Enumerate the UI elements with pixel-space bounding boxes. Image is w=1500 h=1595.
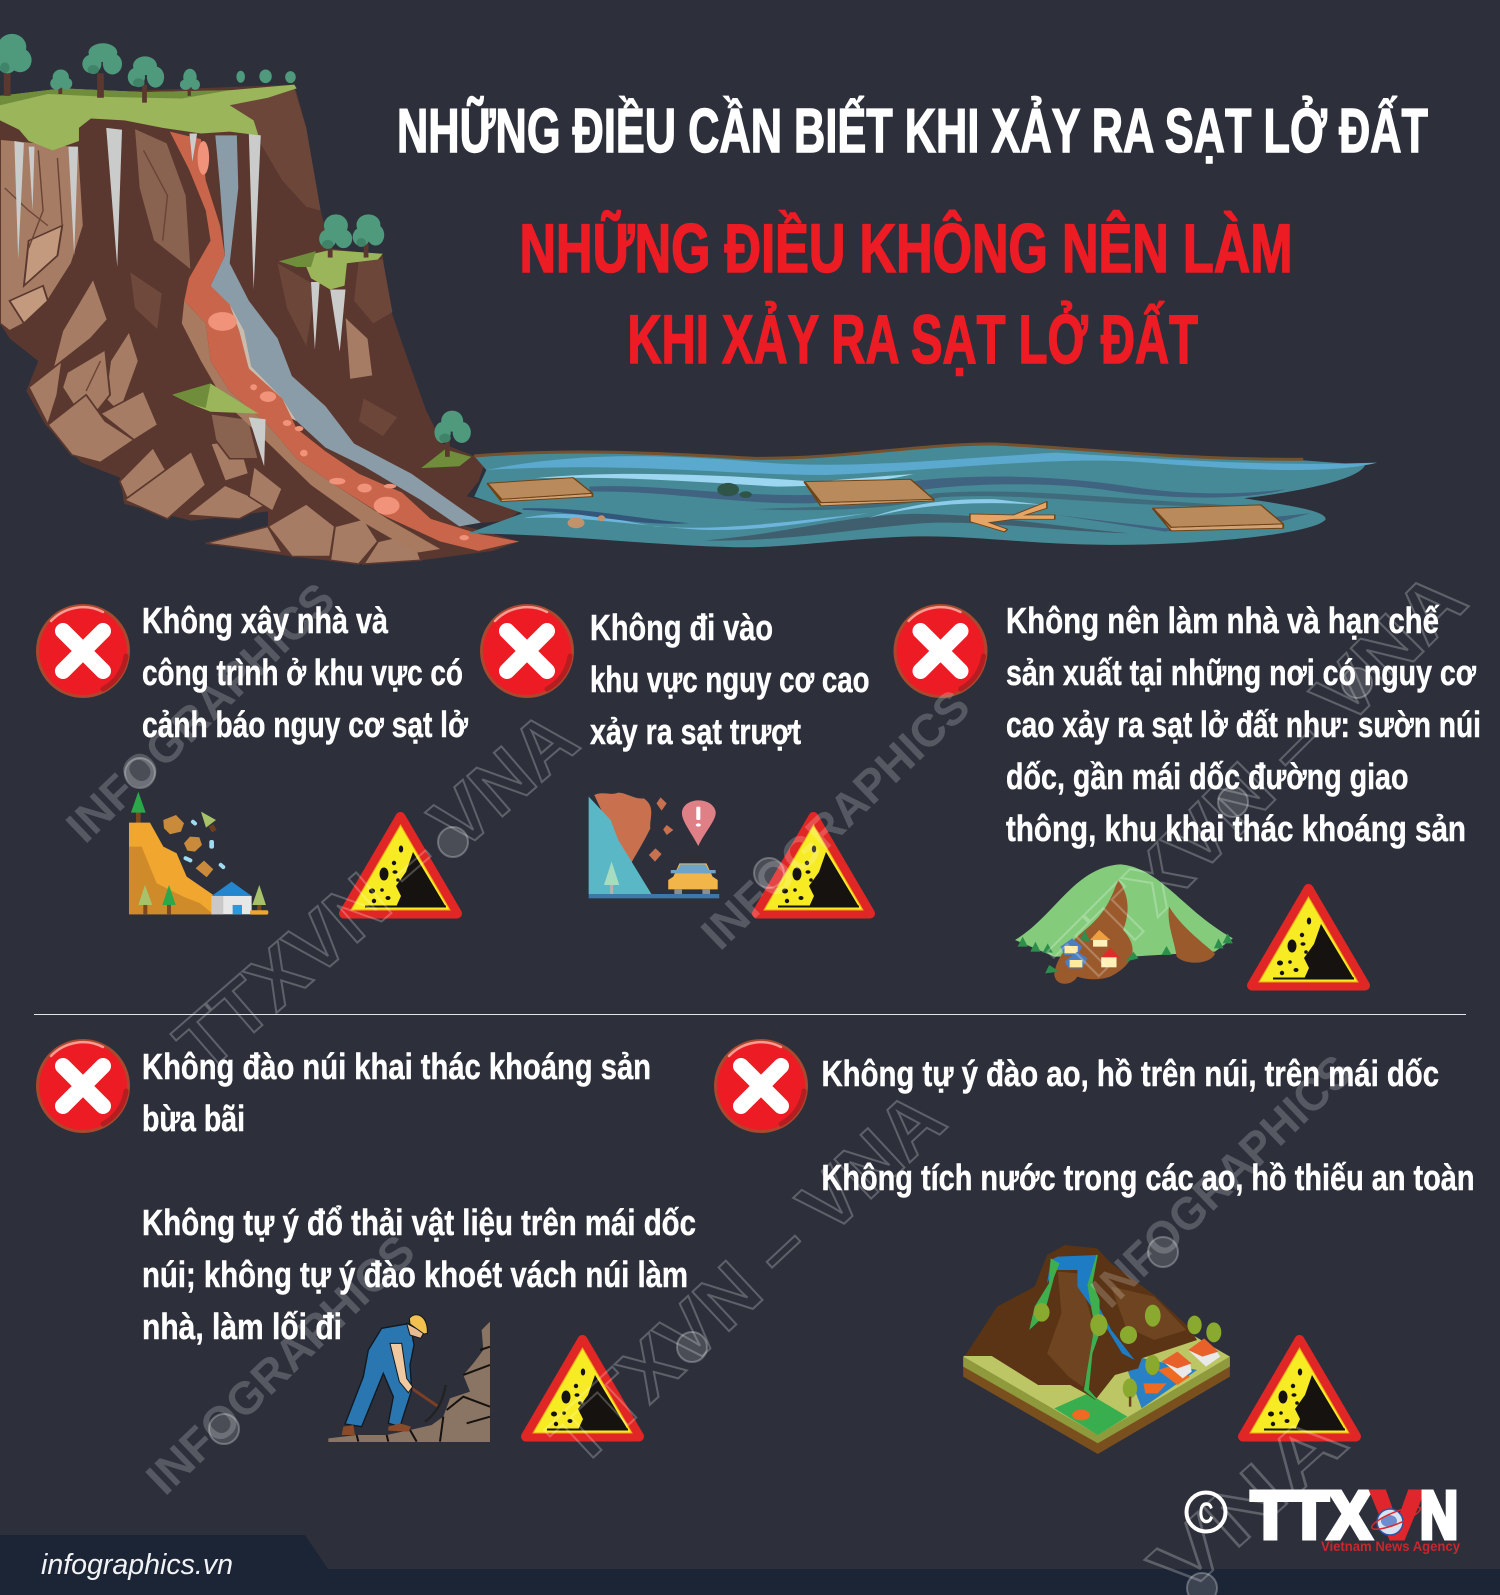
grass ledges: [279, 250, 383, 290]
plank 3: [1153, 505, 1283, 531]
icon: landslide on road with car: [589, 793, 719, 898]
red heading: KHI XẢY RA SẠT LỞ ĐẤT: [628, 301, 1198, 378]
warning sign 2: [757, 817, 870, 914]
mud edge: [211, 286, 297, 421]
text block 4: bừa bãi: [142, 1098, 245, 1139]
icon: isometric mountain with reservoir: [963, 1245, 1230, 1454]
text block 2: Không đi vào: [590, 607, 773, 648]
grass plateau: [0, 85, 297, 150]
watermarks: [56, 554, 1482, 1595]
text block 1: Không xây nhà và: [142, 600, 389, 641]
text block 2: [590, 607, 870, 752]
illustration: landslide cliff: [0, 34, 522, 564]
icon: red cross 1: [36, 604, 130, 698]
red heading: [520, 210, 1292, 378]
text block 5: [822, 1053, 1474, 1198]
branch: [970, 502, 1055, 532]
logo: TTXVN: [1186, 1478, 1460, 1554]
river bands: [486, 453, 1377, 541]
copyright symbol: C: [1198, 1497, 1214, 1530]
watermarks: TTXVN – VNA: [532, 1074, 961, 1482]
orange mudslide: [170, 132, 519, 551]
icon: red cross 2: [480, 604, 574, 698]
illustration: river with planks: [468, 444, 1377, 547]
icon: green mountain with landslides and houses: [1015, 864, 1233, 984]
text block 2: khu vực nguy cơ cao: [590, 659, 870, 700]
logo globe: [1370, 1503, 1422, 1535]
plank 2: [805, 479, 934, 506]
text block 4: Không tự ý đổ thải vật liệu trên mái dốc: [142, 1202, 696, 1243]
logo wordmark: N: [1420, 1478, 1458, 1553]
icon: miner with pickaxe: [328, 1315, 490, 1442]
divider: [34, 1014, 1466, 1015]
text block 4: núi; không tự ý đào khoét vách núi làm: [142, 1254, 688, 1295]
icon: rockfall on house: [129, 792, 268, 915]
river brown bank: [474, 444, 1303, 459]
watermarks: INFOGRAPHICS: [56, 572, 345, 852]
watermarks: INFOGRAPHICS: [1081, 1044, 1362, 1317]
logo wordmark: TTX: [1251, 1478, 1371, 1553]
text block 3: [1006, 600, 1481, 849]
icon: red cross 5: [714, 1039, 808, 1133]
copyright symbol: [1186, 1492, 1226, 1532]
waterfalls: [14, 128, 345, 466]
text block 1: công trình ở khu vực có: [142, 652, 463, 693]
icon: red cross 3: [894, 604, 988, 698]
text block 3: dốc, gần mái dốc đường giao: [1006, 756, 1408, 797]
gray water stream: [211, 135, 481, 526]
warning sign 3: [1252, 889, 1365, 986]
footer band: [0, 1535, 1500, 1595]
watermarks: INFOGRAPHICS: [691, 679, 980, 959]
watermarks: INFOGRAPHICS: [136, 1224, 425, 1504]
text block 2: xảy ra sạt trượt: [590, 711, 801, 752]
text block 1: cảnh báo nguy cơ sạt lở: [142, 704, 468, 745]
rocks: [568, 483, 752, 528]
icon: red cross 4: [36, 1039, 130, 1133]
logo wordmark: V: [1372, 1478, 1422, 1553]
warning sign 1: [344, 817, 457, 914]
text block 4: nhà, làm lối đi: [142, 1306, 342, 1347]
footer site name: infographics.vn: [41, 1549, 233, 1581]
plank 1: [488, 478, 592, 502]
watermarks: TTXVN – VNA: [1035, 554, 1482, 1002]
text block 1: [142, 600, 468, 745]
watermarks: TTXVN – VNA: [158, 693, 594, 1088]
text block 4: Không đào núi khai thác khoáng sản: [142, 1046, 651, 1087]
warning sign 4: [526, 1340, 639, 1436]
warning sign 5: [1243, 1340, 1356, 1436]
trees: [0, 34, 471, 457]
logo tagline: Vietnam News Agency: [1321, 1538, 1460, 1554]
logo wordmark: [1251, 1478, 1458, 1553]
text block 4: [142, 1046, 696, 1347]
